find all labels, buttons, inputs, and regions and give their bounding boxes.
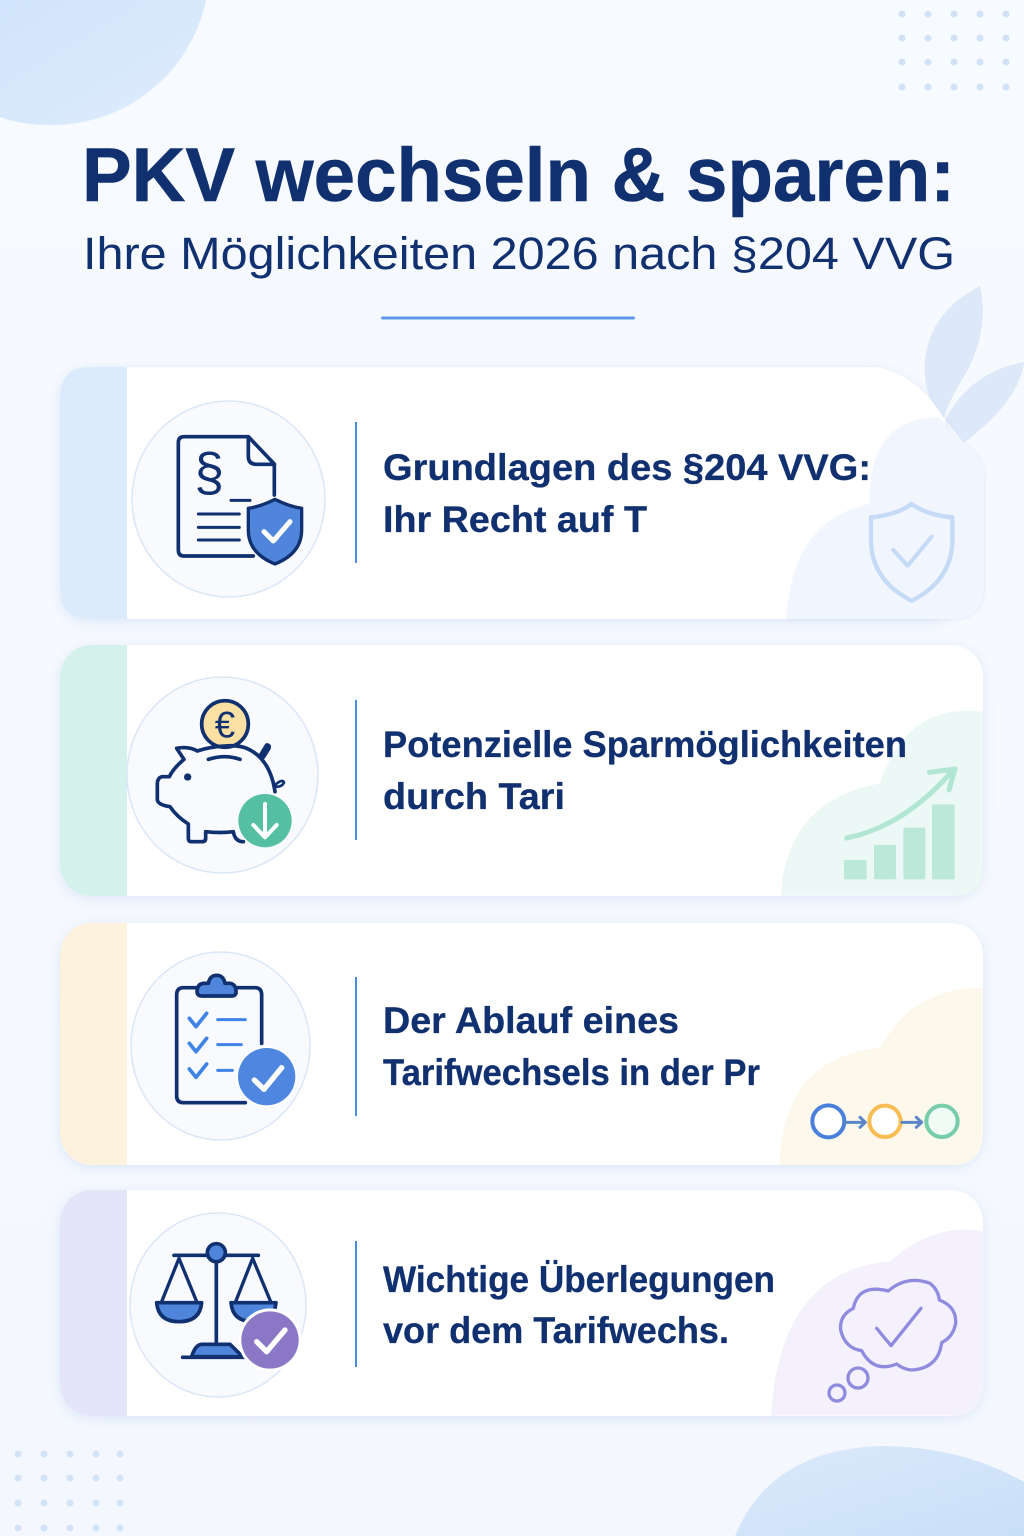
- accent strip: yellow: [60, 923, 127, 1165]
- icon: scales with check badge: [130, 1213, 306, 1397]
- decorative blob: bottom right: [735, 1446, 1024, 1536]
- heading text: Wichtige Überlegungen: [383, 1259, 775, 1300]
- heading text: Der Ablauf eines: [383, 1000, 679, 1041]
- heading text: Potenzielle Sparmöglichkeiten: [383, 724, 907, 765]
- heading text: [383, 1259, 775, 1351]
- accent strip: green: [60, 645, 127, 896]
- panel: Grundlagen des §204 VVG: [60, 367, 984, 619]
- subtitle: Ihre Möglichkeiten 2026 nach §204 VVG: [83, 228, 955, 279]
- background blob with shield: [787, 418, 984, 619]
- accent strip: blue: [60, 367, 127, 619]
- heading text: vor dem Tarifwechs.: [383, 1310, 729, 1351]
- heading text: durch Tari: [383, 776, 565, 817]
- heading text: [383, 447, 871, 540]
- title: PKV wechseln & sparen:: [82, 133, 955, 218]
- heading text: Grundlagen des §204 VVG:: [383, 447, 871, 488]
- background blob with process steps: [779, 988, 983, 1165]
- panel: Der Ablauf eines Tarifwechsels: [60, 923, 983, 1165]
- heading text: Tarifwechsels in der Pr: [383, 1052, 760, 1093]
- accent strip: purple: [60, 1190, 127, 1416]
- icon: piggy bank with euro coin: €: [215, 704, 235, 745]
- dot grid: top right: [898, 10, 1010, 90]
- icon: document with paragraph sign and shield: §: [194, 444, 224, 503]
- dot grid: bottom left: [14, 1450, 124, 1532]
- decorative leaves: [925, 286, 1024, 443]
- decorative blob: top left: [0, 0, 206, 125]
- heading text: [383, 1000, 760, 1093]
- background blob with thought bubble: [771, 1229, 983, 1416]
- panel: Wichtige Überlegungen: [60, 1190, 983, 1416]
- background blob with growth chart: [781, 711, 983, 896]
- heading text: [383, 724, 907, 817]
- icon: document with paragraph sign and shield: [132, 401, 325, 597]
- panel: Potenzielle Sparmöglichkeiten: [60, 645, 983, 896]
- icon: piggy bank with euro coin: [127, 677, 318, 873]
- icon: clipboard checklist: [131, 952, 310, 1140]
- heading text: Ihr Recht auf T: [383, 499, 647, 540]
